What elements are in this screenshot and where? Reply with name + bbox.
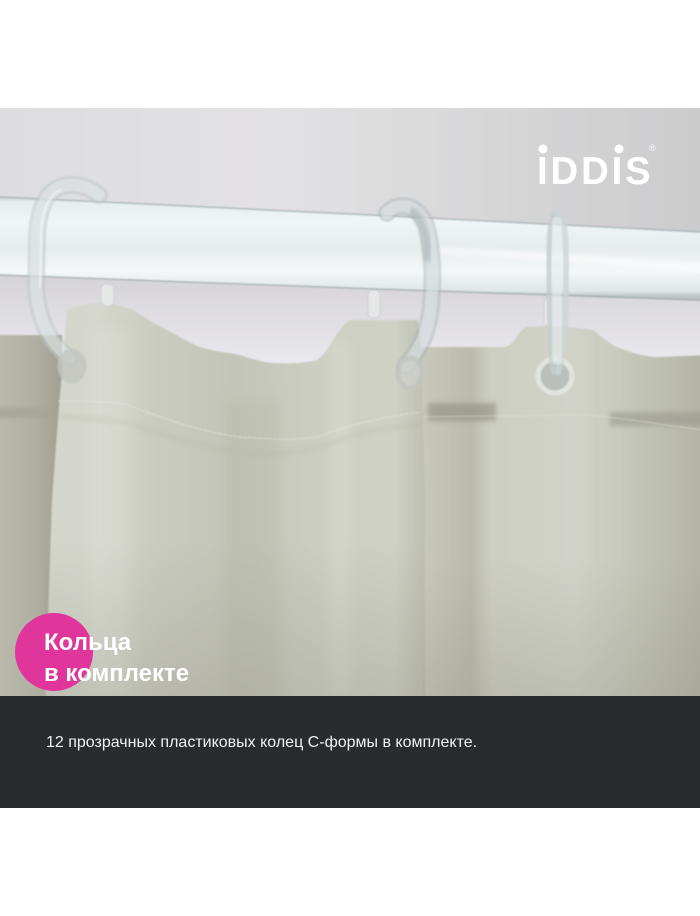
back curtain left <box>0 335 62 705</box>
hook studs under rod <box>101 284 553 326</box>
heading: Кольца в комплекте: Кольца <box>44 629 132 656</box>
curtain rod <box>0 196 700 300</box>
front curtain <box>45 303 425 705</box>
logo: IDDIS: IDDIS <box>537 150 651 193</box>
ring right with eyelet <box>538 212 572 393</box>
back curtain middle and right <box>421 326 700 705</box>
caption text: 12 прозрачных пластиковых колец С-формы в комплекте. <box>46 734 477 751</box>
logo: IDDIS: ® <box>649 143 656 153</box>
ring left <box>36 185 99 381</box>
photo: curtain on rod <box>0 100 700 705</box>
infographic page <box>0 108 700 808</box>
ring middle <box>387 206 432 388</box>
heading: Кольца в комплекте: в комплекте <box>44 660 189 687</box>
pink badge circle <box>15 613 93 691</box>
dark caption bar <box>0 696 700 808</box>
